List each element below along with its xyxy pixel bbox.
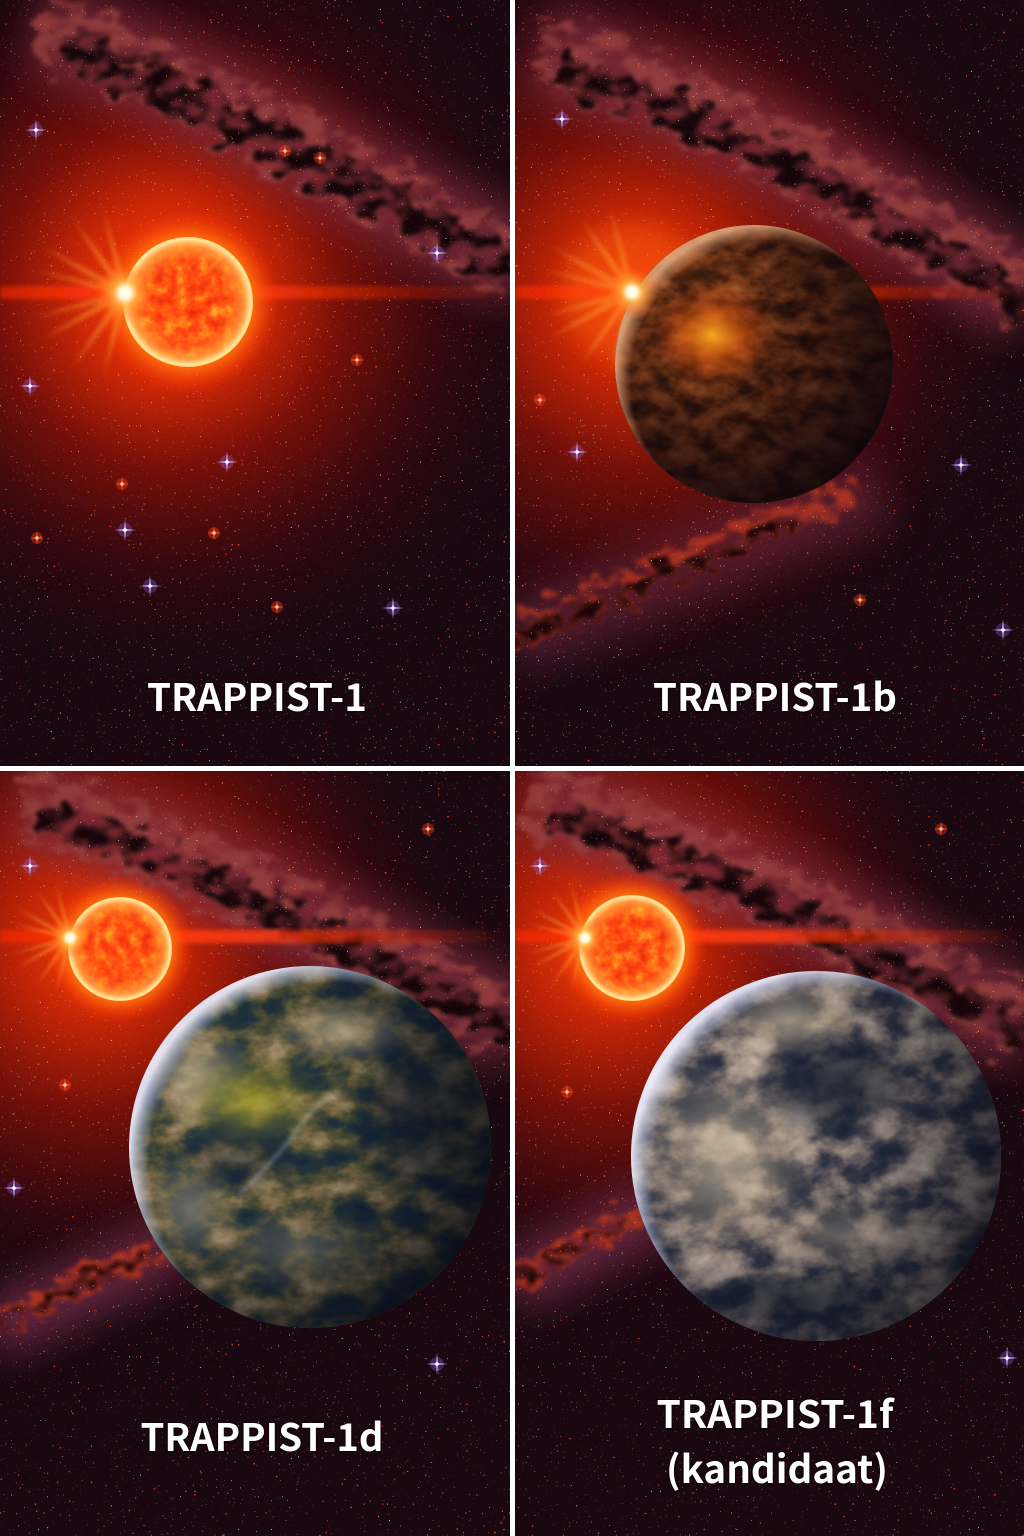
icon: red dwarf star [45, 216, 276, 390]
title: TRAPPIST-1d: TRAPPIST-1d [140, 1407, 384, 1462]
title: TRAPPIST-1b: TRAPPIST-1b [653, 667, 897, 722]
title: TRAPPIST-1: TRAPPIST-1 [147, 667, 367, 722]
panel: TRAPPIST-1b [510, 0, 1024, 766]
title: TRAPPIST-1f (kandidaat): TRAPPIST-1f [656, 1384, 895, 1439]
icon: planet TRAPPIST-1d [129, 966, 491, 1328]
panel: TRAPPIST-1f (kandidaat) [510, 771, 1024, 1536]
icon: red dwarf star [528, 872, 708, 1024]
panel: TRAPPIST-1d [0, 771, 520, 1536]
icon: planet TRAPPIST-1f [630, 971, 1001, 1341]
icon: planet TRAPPIST-1b [544, 208, 893, 503]
panel: TRAPPIST-1 star [0, 0, 520, 766]
title: TRAPPIST-1f (kandidaat): (kandidaat) [666, 1439, 888, 1494]
title: TRAPPIST-1f (kandidaat) [658, 1398, 895, 1491]
icon: red dwarf star [13, 875, 194, 1023]
